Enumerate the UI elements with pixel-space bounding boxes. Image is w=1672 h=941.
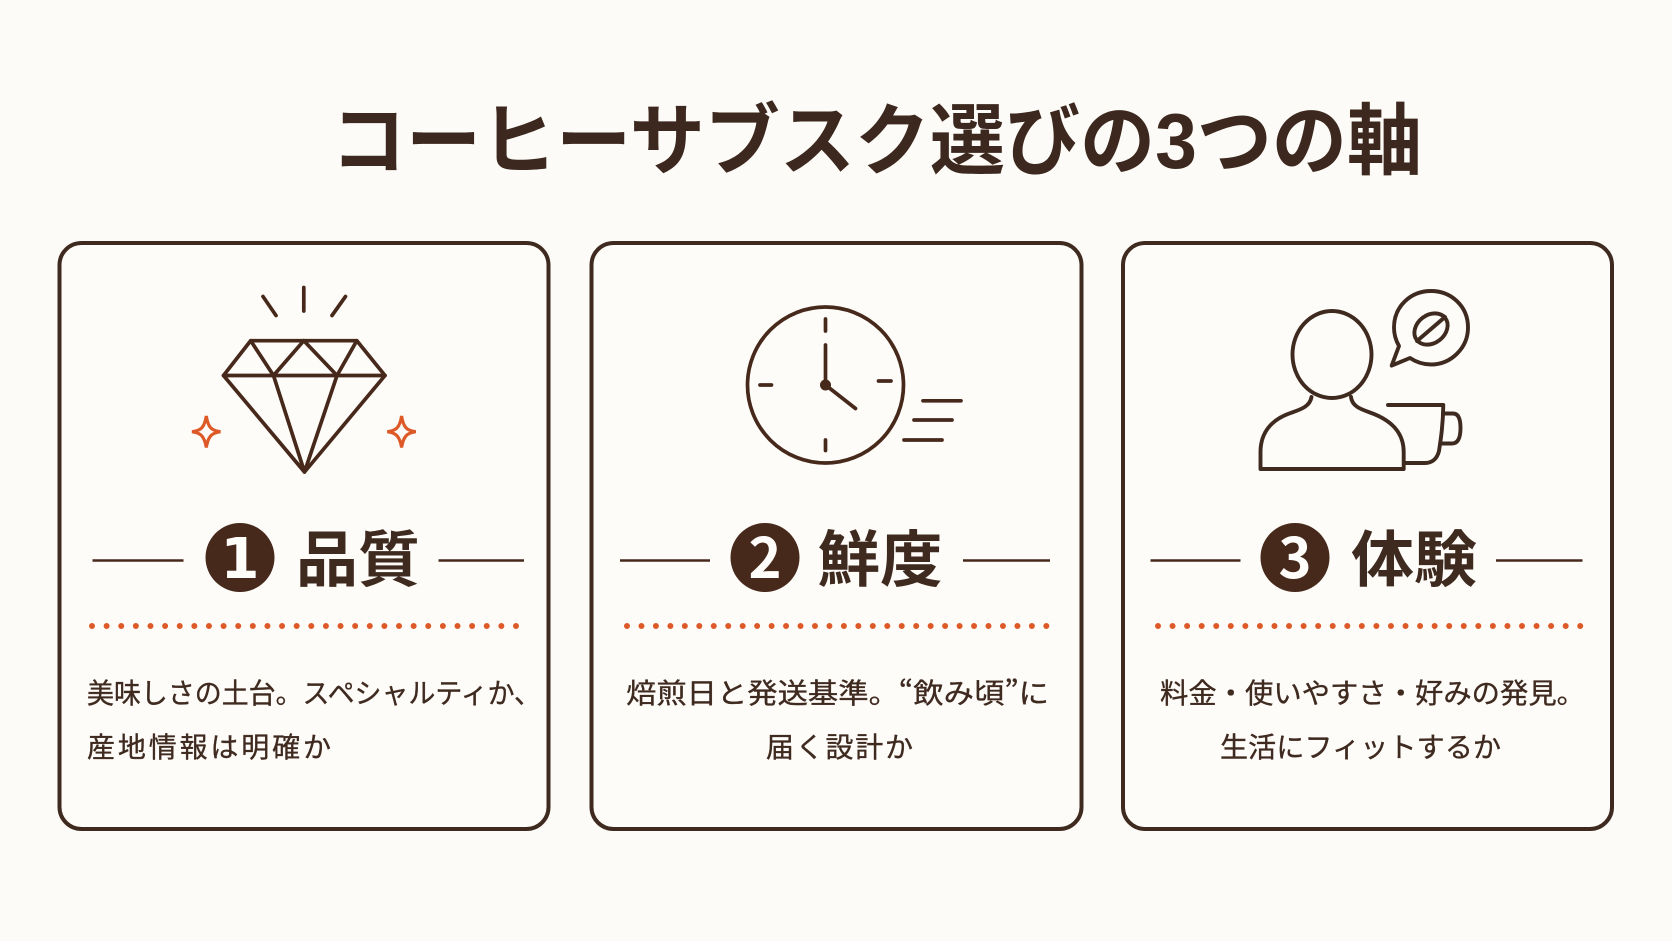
heading: 3 experience: [1150, 510, 1582, 599]
heading: 1 quality: 1: [221, 527, 259, 592]
icon: diamond: [192, 288, 416, 472]
heading: 1 quality: 品質: [296, 510, 420, 599]
title: コーヒーサブスク選びの3つの軸: [331, 97, 1422, 185]
panel: quality: [60, 243, 548, 829]
icon: clock with speed lines: [748, 307, 961, 463]
text: quality description: 美味しさの土台。スペシャルティか、: [87, 672, 541, 712]
text: experience description: [1160, 672, 1585, 766]
panel: experience: [1123, 243, 1612, 829]
card frame: freshness: [592, 243, 1082, 829]
heading: 3 experience: 3: [1278, 514, 1312, 595]
text: experience description: 生活にフィットするか: [1220, 726, 1501, 766]
dotted divider: [92, 623, 516, 629]
text: quality description: [87, 672, 541, 766]
text: quality description: 産地情報は明確か: [87, 726, 331, 766]
heading: 2 freshness: 鮮度: [818, 510, 942, 599]
card frame: experience: [1123, 243, 1612, 829]
heading: 2 freshness: [620, 510, 1050, 599]
text: freshness description: 焙煎日と発送基準。“飲み頃”に: [626, 672, 1049, 712]
card frame: quality: [60, 243, 548, 829]
panel: freshness: [592, 243, 1082, 829]
dotted divider: [1158, 623, 1580, 629]
heading: 1 quality: [92, 510, 524, 599]
heading: 2 freshness: 2: [748, 514, 782, 595]
icon: person with coffee and speech bubble: [1260, 291, 1468, 469]
text: freshness description: [626, 672, 1049, 766]
text: experience description: 料金・使いやすさ・好みの発見。: [1160, 672, 1585, 712]
dotted divider: [627, 623, 1046, 629]
text: freshness description: 届く設計か: [766, 726, 913, 766]
heading: 3 experience: 体験: [1351, 510, 1477, 599]
